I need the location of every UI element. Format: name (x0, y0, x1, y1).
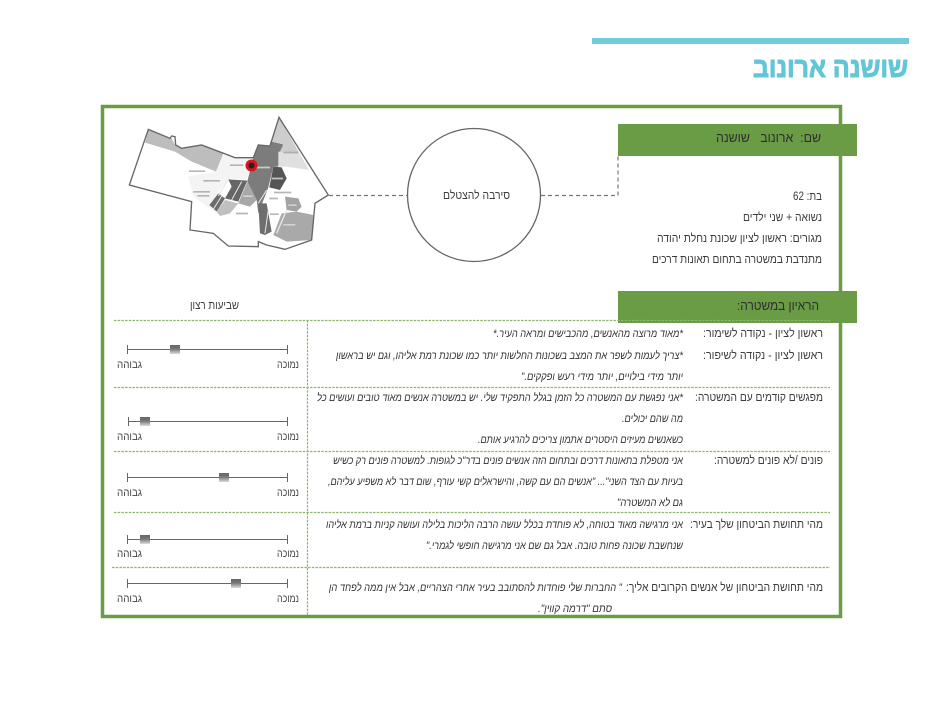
row 2: previous encounters (317, 391, 823, 446)
row 1: Rishon Lezion (335, 327, 823, 383)
row 3: turning to police: פונים /לא פונים למשטרה: (714, 454, 823, 467)
row 4: personal sense of safety: מהי תחושת הביטחון שלך בעיר: (690, 518, 823, 531)
neighbourhood map (129, 117, 328, 249)
dashed connector: map to circle (329, 194, 407, 196)
interview heading: הראיון במשטרה: (737, 298, 819, 313)
slider 1: גבוהה (117, 359, 142, 371)
row 1: Rishon Lezion: ראשון לציון - נקודה לשיפור: (703, 349, 823, 362)
slider 1 (117, 345, 299, 371)
slider 3 (117, 473, 299, 499)
slider 4 (117, 535, 299, 560)
name text: שם: ארונוב שושנה (716, 130, 821, 145)
row 5: safety of close people: " החברות שלי פוחדות להסתובב בעיר אחרי הצהריים, אבל אין ממה לפחד הן (328, 581, 623, 594)
map shaded districts (145, 117, 313, 242)
row 5: safety of close people (328, 581, 823, 615)
main panel frame (102, 106, 840, 616)
title: שושנה ארונוב (753, 52, 908, 83)
top accent bar (592, 38, 909, 44)
slider 2: נמוכה (277, 431, 299, 443)
slider 2 (117, 417, 299, 443)
row 1: Rishon Lezion: ראשון לציון - נקודה לשימור: (703, 327, 823, 340)
slider 3: גבוהה (117, 487, 142, 499)
name band (618, 124, 857, 156)
dashed connector: circle to name band (541, 156, 618, 196)
row 5: safety of close people: סתם "דרמה קווין". (538, 603, 612, 615)
table dividers (112, 320, 830, 615)
row 2: previous encounters: מפגשים קודמים עם המשטרה: (695, 392, 823, 404)
personal details: מתנדבת במשטרה בתחום תאונות דרכים (652, 254, 822, 266)
personal details: מגורים: ראשון לציון שכונת נחלת יהודה (657, 232, 822, 245)
slider 5: נמוכה (277, 593, 299, 605)
row 2: previous encounters: כשאנשים מעיזים היסטרים אתמון צריכים להרגיע אותם. (478, 433, 683, 446)
row 1: Rishon Lezion: *מאוד מרוצה מהאנשים, מהכבישים ומראה העיר.* (493, 328, 684, 340)
row 2: previous encounters: *אני נפגשת עם המשטרה כל הזמן בגלל התפקיד שלי. יש במשטרה אנשים מאוד טובים ועושים כל (317, 391, 684, 404)
row 3: turning to police: אני מטפלת בתאונות דרכים ובתחום הזה אנשים פונים בדר"כ לגופות. למשטרה פונים רק כשיש (333, 454, 684, 467)
row 5: safety of close people: מהי תחושת הביטחון של אנשים הקרובים אליך: (626, 581, 823, 594)
map outline (129, 117, 328, 249)
slider 2: גבוהה (117, 431, 142, 443)
slider 1: נמוכה (277, 359, 299, 371)
row 1: Rishon Lezion: *צריך לעמות לשפר את המצב בשכונות החלשות יותר כמו שכונת רמת אליהו, וגם יש בראשון (335, 349, 684, 362)
circle caption: סירבה להצטלם (443, 189, 510, 202)
row 2: previous encounters: מה שהם יכולים. (622, 412, 683, 425)
row 1: Rishon Lezion: יותר מידי בילויים, יותר מידי רעש ופקקים." (521, 370, 683, 383)
slider 5: גבוהה (117, 593, 142, 605)
satisfaction column heading: שביעות רצון (190, 300, 239, 312)
slider 3: נמוכה (277, 487, 299, 499)
personal details (652, 191, 822, 266)
slider 4: נמוכה (277, 548, 299, 560)
slider 4: גבוהה (117, 548, 142, 560)
row 3: turning to police (328, 454, 823, 509)
interview band (618, 291, 857, 323)
row 4: personal sense of safety: אני מרגישה מאוד בטוחה, לא פוחדת בכלל עושה הרבה הליכות בלילה ועושה קניות ברמת אליהו (326, 518, 684, 531)
row 4: personal sense of safety: שנחשבת שכונה פחות טובה. אבל גם שם אני מרגישה חופשי לגמרי." (426, 539, 684, 552)
row 3: turning to police: בעיות עם הצד השני"... "אנשים הם עם קשה, והישראלים קשי עורף, שום דבר לא משפיע עליהם, (328, 475, 683, 488)
slider 5 (117, 579, 299, 605)
row 3: turning to police: גם לא המשטרה" (617, 496, 683, 509)
map location marker (246, 160, 258, 172)
personal details: בת: 62 (793, 191, 822, 203)
circle: refused photo (408, 128, 540, 262)
row 4: personal sense of safety (326, 518, 823, 552)
personal details: נשואה + שני ילדים (743, 211, 822, 224)
